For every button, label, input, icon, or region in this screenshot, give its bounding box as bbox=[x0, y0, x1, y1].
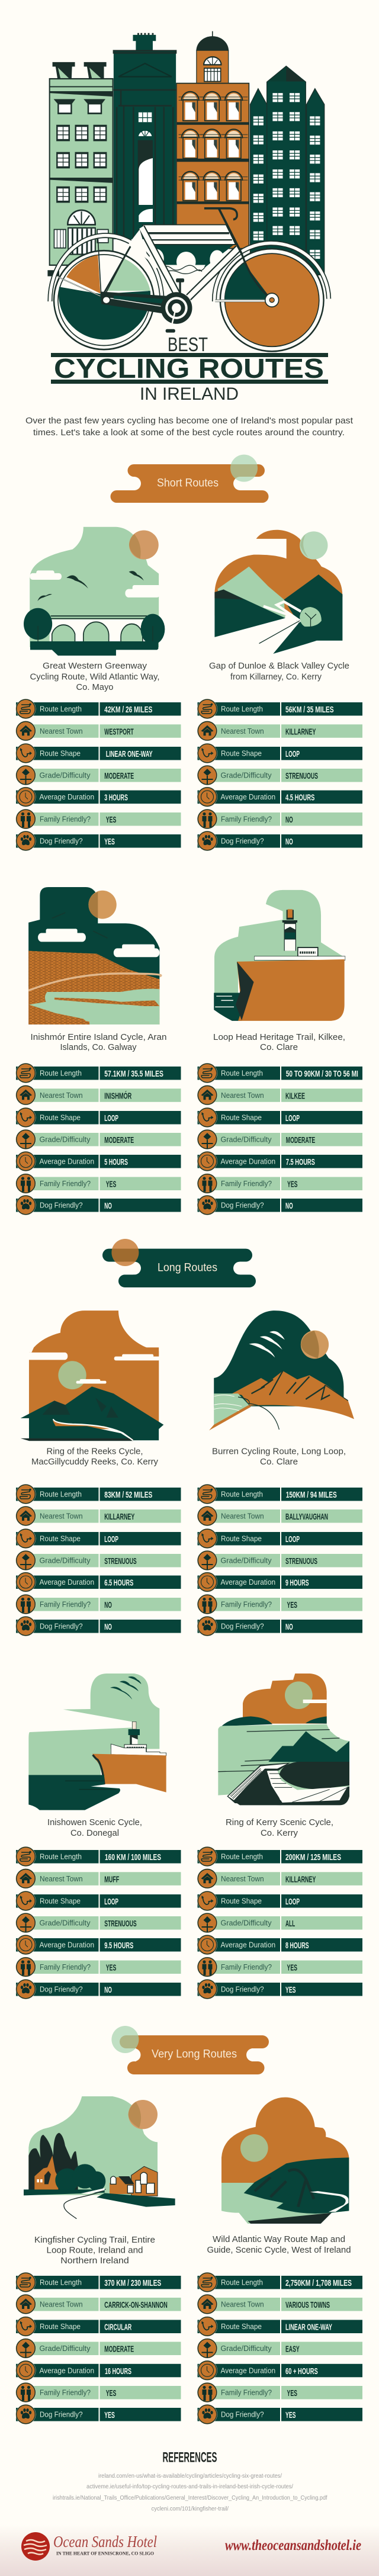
row: nearest town: BALLYVAUGHAN bbox=[285, 1512, 328, 1522]
row: family: Family Friendly? bbox=[221, 2389, 272, 2397]
row: dog bbox=[15, 1195, 181, 1215]
caption: Inishmor bbox=[31, 1032, 167, 1052]
row: route length: Route Length bbox=[40, 1069, 82, 1078]
table: Kingfisher stats bbox=[15, 2272, 181, 2424]
row: dog: YES bbox=[104, 2410, 115, 2420]
caption: Greenway: Great Western Greenway bbox=[43, 661, 147, 671]
references list: activeme.ie/useful-info/top-cycling-routes-and-trails-in-ireland-best-irish-cycle-routes/ bbox=[86, 2483, 293, 2490]
row: route shape bbox=[15, 2317, 181, 2337]
row: route length: Route Length bbox=[40, 705, 82, 713]
row: route shape: Route Shape bbox=[40, 1535, 81, 1543]
row: grade: Grade/Difficulty bbox=[39, 1919, 91, 1927]
row: route shape: Route Shape bbox=[40, 1113, 81, 1122]
row: duration: Average Duration bbox=[39, 793, 94, 801]
references heading: REFERENCES bbox=[162, 2449, 217, 2466]
caption: Greenway: Cycling Route, Wild Atlantic Way, bbox=[30, 672, 160, 682]
row: route length: 160 KM / 100 MILES bbox=[105, 1852, 161, 1862]
row: family bbox=[15, 2382, 181, 2402]
row: route shape: Route Shape bbox=[40, 750, 81, 758]
row: duration: 8 HOURS bbox=[285, 1941, 309, 1951]
illustration: Ring of Kerry bbox=[218, 1674, 349, 1805]
row: grade bbox=[15, 1913, 181, 1933]
intro text: Over the past few years cycling has become one of Ireland's most popular past bbox=[25, 416, 354, 426]
logo: Ocean Sands Hotel: Ocean Sands Hotel bbox=[53, 2533, 157, 2551]
row: dog: Dog Friendly? bbox=[40, 2410, 83, 2418]
caption: Dunloe: from Killarney, Co. Kerry bbox=[230, 672, 322, 682]
row: nearest town bbox=[197, 1868, 362, 1888]
row: grade: Grade/Difficulty bbox=[39, 1136, 91, 1144]
row: nearest town: VARIOUS TOWNS bbox=[285, 2300, 330, 2310]
banner: Very Long Routes: Very Long Routes bbox=[152, 2048, 237, 2061]
row: dog: Dog Friendly? bbox=[221, 2410, 264, 2418]
caption: Burren bbox=[212, 1446, 346, 1467]
row: dog: Dog Friendly? bbox=[221, 1201, 264, 1209]
row: dog bbox=[15, 831, 181, 851]
row: dog: Dog Friendly? bbox=[40, 837, 83, 846]
row: grade: MODERATE bbox=[104, 771, 134, 781]
intro text: times. Let's take a look at some of the best cycle routes around the country. bbox=[33, 428, 345, 438]
row: family: NO bbox=[285, 815, 293, 825]
row: route length: 2,750KM / 1,708 MILES bbox=[285, 2278, 352, 2288]
row: duration: Average Duration bbox=[220, 793, 275, 801]
row: route length: 150KM / 94 MILES bbox=[286, 1490, 337, 1500]
row: route shape bbox=[15, 1891, 181, 1911]
row: grade: Grade/Difficulty bbox=[220, 1919, 272, 1927]
row: dog: Dog Friendly? bbox=[40, 1201, 83, 1209]
row: route length bbox=[197, 1484, 362, 1504]
row: duration: Average Duration bbox=[220, 2366, 275, 2375]
row: grade bbox=[15, 2338, 181, 2358]
row: dog: Dog Friendly? bbox=[40, 1623, 83, 1631]
title: Best Cycling Routes in Ireland: CYCLING ROUTES bbox=[54, 353, 324, 384]
row: grade bbox=[197, 1550, 362, 1570]
row: dog bbox=[197, 1195, 362, 1215]
title: Best Cycling Routes in Ireland bbox=[51, 333, 328, 404]
row: family bbox=[197, 1957, 362, 1977]
row: route shape: LOOP bbox=[285, 749, 300, 759]
row: route shape: CIRCULAR bbox=[104, 2323, 131, 2332]
row: nearest town bbox=[15, 2294, 181, 2314]
illustration: Kingfisher trail bbox=[24, 2096, 175, 2219]
row: duration: Average Duration bbox=[39, 1578, 94, 1586]
row: nearest town bbox=[15, 721, 181, 741]
row: route length: Route Length bbox=[40, 2279, 82, 2287]
row: duration bbox=[197, 1572, 362, 1592]
row: duration: 9.5 HOURS bbox=[104, 1941, 133, 1951]
row: nearest town: Nearest Town bbox=[40, 1512, 83, 1521]
caption: Wild Atlantic Way: Wild Atlantic Way Route Map and bbox=[213, 2234, 345, 2244]
references list: cycleni.com/101/kingfisher-trail/ bbox=[152, 2505, 229, 2512]
row: duration: 7.5 HOURS bbox=[286, 1157, 315, 1167]
row: nearest town bbox=[197, 1506, 362, 1526]
row: nearest town bbox=[15, 1085, 181, 1105]
row: dog: Dog Friendly? bbox=[221, 1985, 264, 1993]
row: grade: STRENUOUS bbox=[104, 1556, 137, 1566]
row: route shape: LOOP bbox=[104, 1534, 118, 1544]
row: duration: 3 HOURS bbox=[104, 793, 128, 803]
caption: Loop Head: Loop Head Heritage Trail, Kilkee, bbox=[213, 1032, 345, 1042]
row: duration: 6.5 HOURS bbox=[104, 1578, 133, 1588]
row: route length bbox=[197, 699, 362, 719]
row: grade bbox=[15, 765, 181, 785]
row: nearest town bbox=[197, 721, 362, 741]
row: route shape: LOOP bbox=[285, 1113, 300, 1123]
orange tower and building bbox=[176, 31, 249, 249]
row: grade: Grade/Difficulty bbox=[220, 1556, 272, 1565]
bicycle bbox=[47, 208, 329, 351]
row: duration: 16 HOURS bbox=[105, 2366, 131, 2376]
caption: Loop Head bbox=[213, 1032, 345, 1052]
row: nearest town: KILLARNEY bbox=[285, 1874, 316, 1884]
row: grade bbox=[197, 765, 362, 785]
row: route shape bbox=[197, 743, 362, 763]
row: grade: ALL bbox=[285, 1919, 295, 1929]
row: duration bbox=[15, 1935, 181, 1955]
row: family: Family Friendly? bbox=[40, 1600, 91, 1608]
row: grade: EASY bbox=[285, 2344, 300, 2355]
row: nearest town: Nearest Town bbox=[221, 1875, 264, 1883]
caption: Ring of Kerry: Ring of Kerry Scenic Cycle, bbox=[226, 1817, 333, 1827]
row: family: YES bbox=[106, 1962, 116, 1973]
row: family: Family Friendly? bbox=[221, 1963, 272, 1971]
row: nearest town: Nearest Town bbox=[221, 2300, 264, 2308]
caption: Loop Head: Co. Clare bbox=[260, 1042, 298, 1052]
row: family: Family Friendly? bbox=[40, 1180, 91, 1188]
row: dog: YES bbox=[285, 2410, 296, 2420]
row: route length: 370 KM / 230 MILES bbox=[104, 2278, 161, 2288]
row: route shape: Route Shape bbox=[40, 1897, 81, 1906]
row: duration bbox=[15, 787, 181, 807]
row: grade bbox=[15, 1550, 181, 1570]
row: dog bbox=[15, 1616, 181, 1636]
row: nearest town: Nearest Town bbox=[221, 1512, 264, 1521]
row: family: Family Friendly? bbox=[221, 1600, 272, 1608]
row: family: YES bbox=[106, 815, 116, 825]
banner: Long Routes bbox=[102, 1239, 263, 1287]
row: route length: 56KM / 35 MILES bbox=[285, 705, 334, 715]
caption: Wild Atlantic Way bbox=[207, 2234, 351, 2255]
row: nearest town: Nearest Town bbox=[221, 727, 264, 735]
row: route shape bbox=[197, 1107, 362, 1128]
row: route length: 42KM / 26 MILES bbox=[104, 705, 152, 715]
references list: ireland.com/en-us/what-is-available/cycling/articles/cycling-six-great-routes/ bbox=[98, 2472, 282, 2479]
row: grade: Grade/Difficulty bbox=[39, 2344, 91, 2353]
row: duration: 60 + HOURS bbox=[285, 2366, 318, 2376]
row: family: YES bbox=[287, 1180, 297, 1189]
row: route shape: LOOP bbox=[104, 1113, 118, 1123]
row: route shape: Route Shape bbox=[221, 750, 262, 758]
caption: Wild Atlantic Way: Guide, Scenic Cycle, West of Ireland bbox=[207, 2245, 351, 2255]
row: nearest town bbox=[15, 1868, 181, 1888]
caption: Burren: Burren Cycling Route, Long Loop, bbox=[212, 1446, 346, 1457]
caption: Kingfisher: Northern Ireland bbox=[60, 2256, 129, 2266]
logo: Ocean Sands Hotel bbox=[21, 2532, 157, 2561]
row: family: YES bbox=[106, 1180, 116, 1189]
row: family bbox=[15, 1174, 181, 1194]
row: grade: MODERATE bbox=[104, 1135, 134, 1145]
row: route length: Route Length bbox=[221, 705, 263, 713]
title: Best Cycling Routes in Ireland: BEST bbox=[168, 333, 208, 355]
table: Dunloe stats bbox=[197, 699, 362, 851]
row: dog: Dog Friendly? bbox=[40, 1985, 83, 1993]
row: duration: Average Duration bbox=[39, 1157, 94, 1165]
table: Loop Head stats bbox=[197, 1063, 362, 1215]
banner: Very Long Routes bbox=[111, 2026, 270, 2074]
table: Greenway stats bbox=[15, 699, 181, 851]
row: duration bbox=[197, 1935, 362, 1955]
row: family bbox=[197, 809, 362, 829]
row: duration: Average Duration bbox=[39, 2366, 94, 2375]
row: route shape bbox=[15, 743, 181, 763]
row: route length: Route Length bbox=[221, 1852, 263, 1861]
row: dog: NO bbox=[285, 837, 293, 847]
caption: Reeks: MacGillycuddy Reeks, Co. Kerry bbox=[31, 1457, 158, 1467]
row: route shape: Route Shape bbox=[221, 1897, 262, 1906]
row: family: Family Friendly? bbox=[40, 1963, 91, 1971]
row: family: Family Friendly? bbox=[40, 2389, 91, 2397]
table: Inishmor stats bbox=[15, 1063, 181, 1215]
row: family: YES bbox=[287, 2388, 297, 2398]
row: route length bbox=[197, 1846, 362, 1867]
row: route shape bbox=[197, 1891, 362, 1911]
row: nearest town: WESTPORT bbox=[104, 727, 134, 737]
row: route shape bbox=[197, 2317, 362, 2337]
row: grade: Grade/Difficulty bbox=[220, 1136, 272, 1144]
illustration: Gap of Dunloe bbox=[214, 530, 342, 654]
row: duration: 5 HOURS bbox=[104, 1157, 128, 1167]
banner: Long Routes: Long Routes bbox=[158, 1261, 217, 1274]
row: family: Family Friendly? bbox=[40, 815, 91, 823]
row: grade: Grade/Difficulty bbox=[220, 2344, 272, 2353]
table: Ring of Kerry stats bbox=[197, 1846, 362, 1999]
row: dog: NO bbox=[104, 1985, 112, 1995]
table: Reeks stats bbox=[15, 1484, 181, 1636]
caption: Inishmor: Inishmór Entire Island Cycle, Aran bbox=[31, 1032, 167, 1042]
row: duration bbox=[15, 1572, 181, 1592]
illustration: Burren bbox=[209, 1311, 354, 1430]
row: grade bbox=[15, 1129, 181, 1149]
row: route length bbox=[15, 1484, 181, 1504]
row: dog bbox=[197, 831, 362, 851]
caption: Dunloe: Gap of Dunloe & Black Valley Cycle bbox=[209, 661, 349, 671]
row: grade bbox=[197, 1129, 362, 1149]
row: nearest town: CARRICK-ON-SHANNON bbox=[104, 2300, 168, 2310]
row: dog: NO bbox=[285, 1622, 293, 1632]
caption: Kingfisher: Loop Route, Ireland and bbox=[46, 2246, 143, 2256]
row: duration: Average Duration bbox=[39, 1941, 94, 1949]
row: route shape: Route Shape bbox=[221, 1113, 262, 1122]
caption: Ring of Kerry bbox=[226, 1817, 333, 1838]
row: dog: NO bbox=[104, 1622, 112, 1632]
caption: Kingfisher: Kingfisher Cycling Trail, Entire bbox=[34, 2235, 155, 2245]
row: route shape bbox=[15, 1528, 181, 1549]
row: dog bbox=[197, 1616, 362, 1636]
row: nearest town bbox=[197, 2294, 362, 2314]
row: dog bbox=[197, 2404, 362, 2424]
banner: Short Routes bbox=[110, 455, 269, 503]
row: route length: Route Length bbox=[221, 1490, 263, 1498]
row: family bbox=[15, 1594, 181, 1614]
caption: Burren: Co. Clare bbox=[260, 1457, 298, 1467]
table: Inishowen stats bbox=[15, 1846, 181, 1999]
row: nearest town: Nearest Town bbox=[40, 727, 83, 735]
row: nearest town bbox=[197, 1085, 362, 1105]
row: nearest town: MUFF bbox=[104, 1874, 119, 1884]
caption: Ring of Kerry: Co. Kerry bbox=[261, 1828, 298, 1838]
row: family: YES bbox=[287, 1962, 297, 1973]
row: dog: NO bbox=[104, 1201, 112, 1211]
row: grade: STRENUOUS bbox=[285, 771, 318, 781]
row: route length bbox=[15, 1063, 181, 1083]
row: nearest town: INISHMÓR bbox=[104, 1090, 131, 1101]
row: nearest town: Nearest Town bbox=[40, 1875, 83, 1883]
illustration: Inishowen lighthouse bbox=[28, 1674, 166, 1810]
row: route length: Route Length bbox=[221, 2279, 263, 2287]
row: grade: MODERATE bbox=[286, 1135, 315, 1145]
row: family bbox=[15, 1957, 181, 1977]
row: family: Family Friendly? bbox=[221, 815, 272, 823]
row: duration bbox=[197, 1151, 362, 1171]
caption: Inishowen: Inishowen Scenic Cycle, bbox=[47, 1817, 142, 1827]
dark centre building bbox=[114, 33, 176, 239]
row: dog bbox=[15, 1979, 181, 1999]
row: family: YES bbox=[287, 1600, 297, 1610]
row: dog bbox=[15, 2404, 181, 2424]
row: grade bbox=[197, 1913, 362, 1933]
caption: Greenway bbox=[30, 661, 160, 692]
row: route shape: LINEAR ONE-WAY bbox=[106, 749, 153, 759]
row: duration: Average Duration bbox=[220, 1157, 275, 1165]
row: nearest town: KILLARNEY bbox=[285, 727, 316, 737]
row: nearest town: Nearest Town bbox=[40, 2300, 83, 2308]
row: duration bbox=[197, 2360, 362, 2381]
row: grade: STRENUOUS bbox=[285, 1556, 317, 1566]
row: route shape: LINEAR ONE-WAY bbox=[285, 2323, 332, 2332]
row: family: Family Friendly? bbox=[221, 1180, 272, 1188]
row: grade: MODERATE bbox=[104, 2344, 134, 2355]
row: duration: 9 HOURS bbox=[285, 1578, 309, 1588]
row: grade bbox=[197, 2338, 362, 2358]
row: nearest town bbox=[15, 1506, 181, 1526]
row: duration bbox=[197, 787, 362, 807]
row: route length: Route Length bbox=[40, 1490, 82, 1498]
row: route length bbox=[15, 1846, 181, 1867]
row: duration bbox=[15, 2360, 181, 2381]
row: dog: NO bbox=[285, 1201, 293, 1211]
intro text bbox=[25, 416, 354, 438]
banner: Short Routes: Short Routes bbox=[157, 477, 219, 489]
table: Burren stats bbox=[197, 1484, 362, 1636]
row: dog: YES bbox=[104, 837, 115, 847]
illustration: Great Western Greenway bridge bbox=[24, 527, 165, 656]
caption: Inishowen bbox=[47, 1817, 142, 1838]
row: duration bbox=[15, 1151, 181, 1171]
dark townhouses bbox=[250, 66, 325, 275]
row: duration: Average Duration bbox=[220, 1578, 275, 1586]
row: dog: Dog Friendly? bbox=[221, 1623, 264, 1631]
title: Best Cycling Routes in Ireland: IN IRELAND bbox=[140, 384, 239, 404]
footer band bbox=[0, 2525, 379, 2576]
row: route shape: Route Shape bbox=[221, 1535, 262, 1543]
row: family bbox=[197, 1174, 362, 1194]
row: nearest town: KILKEE bbox=[285, 1091, 305, 1101]
row: route shape bbox=[197, 1528, 362, 1549]
row: route length bbox=[15, 699, 181, 719]
row: dog: Dog Friendly? bbox=[221, 837, 264, 846]
caption: Kingfisher bbox=[34, 2235, 155, 2266]
references list: irishtrails.ie/National_Trails_Office/Publications/General_Interest/Discover_Cycling_An_Introduction_to_Cycling.pdf bbox=[53, 2494, 327, 2501]
illustration: Loop Head lighthouse bbox=[214, 890, 345, 1021]
row: route shape: LOOP bbox=[285, 1897, 300, 1907]
row: route shape: LOOP bbox=[285, 1534, 300, 1544]
row: route length: 83KM / 52 MILES bbox=[104, 1490, 152, 1500]
row: route shape: Route Shape bbox=[40, 2323, 81, 2331]
row: grade: Grade/Difficulty bbox=[39, 1556, 91, 1565]
row: dog bbox=[197, 1979, 362, 1999]
row: route length: 57.1KM / 35.5 MILES bbox=[104, 1069, 163, 1079]
caption: Inishmor: Islands, Co. Galway bbox=[60, 1042, 137, 1052]
row: nearest town: Nearest Town bbox=[221, 1091, 264, 1100]
row: route length bbox=[15, 2272, 181, 2292]
logo: Ocean Sands Hotel: IN THE HEART OF ENNISCRONE, CO SLIGO bbox=[56, 2551, 154, 2556]
hero illustration: Dublin buildings and bicycle bbox=[47, 31, 329, 351]
caption: Dunloe bbox=[209, 661, 349, 682]
row: family: NO bbox=[104, 1600, 112, 1610]
row: nearest town: KILLARNEY bbox=[104, 1512, 134, 1522]
row: route length: Route Length bbox=[40, 1852, 82, 1861]
references list bbox=[53, 2472, 327, 2512]
row: grade: STRENUOUS bbox=[104, 1919, 137, 1929]
row: route length bbox=[197, 1063, 362, 1083]
row: route length bbox=[197, 2272, 362, 2292]
row: family bbox=[15, 809, 181, 829]
row: nearest town: Nearest Town bbox=[40, 1091, 83, 1100]
illustration: Wild Atlantic Way bbox=[221, 2098, 349, 2224]
row: family bbox=[197, 2382, 362, 2402]
illustration: Inishmor island bbox=[28, 887, 161, 1024]
row: route shape bbox=[15, 1107, 181, 1128]
illustration: Ring of the Reeks bbox=[21, 1311, 163, 1441]
row: grade: Grade/Difficulty bbox=[220, 771, 272, 779]
row: grade: Grade/Difficulty bbox=[39, 771, 91, 779]
green building bbox=[50, 62, 113, 265]
caption: Inishowen: Co. Donegal bbox=[70, 1828, 119, 1838]
caption: Reeks: Ring of the Reeks Cycle, bbox=[46, 1446, 143, 1457]
row: route shape: LOOP bbox=[104, 1897, 118, 1907]
table: Wild Atlantic Way stats bbox=[197, 2272, 362, 2424]
row: duration: Average Duration bbox=[220, 1941, 275, 1949]
row: route length: Route Length bbox=[221, 1069, 263, 1078]
row: family: YES bbox=[106, 2388, 116, 2398]
row: dog: YES bbox=[285, 1985, 296, 1995]
row: route shape: Route Shape bbox=[221, 2323, 262, 2331]
row: family bbox=[197, 1594, 362, 1614]
row: route length: 200KM / 125 MILES bbox=[285, 1852, 341, 1862]
caption: Reeks bbox=[31, 1446, 158, 1467]
caption: Greenway: Co. Mayo bbox=[76, 682, 114, 692]
row: duration: 4.5 HOURS bbox=[285, 793, 314, 803]
